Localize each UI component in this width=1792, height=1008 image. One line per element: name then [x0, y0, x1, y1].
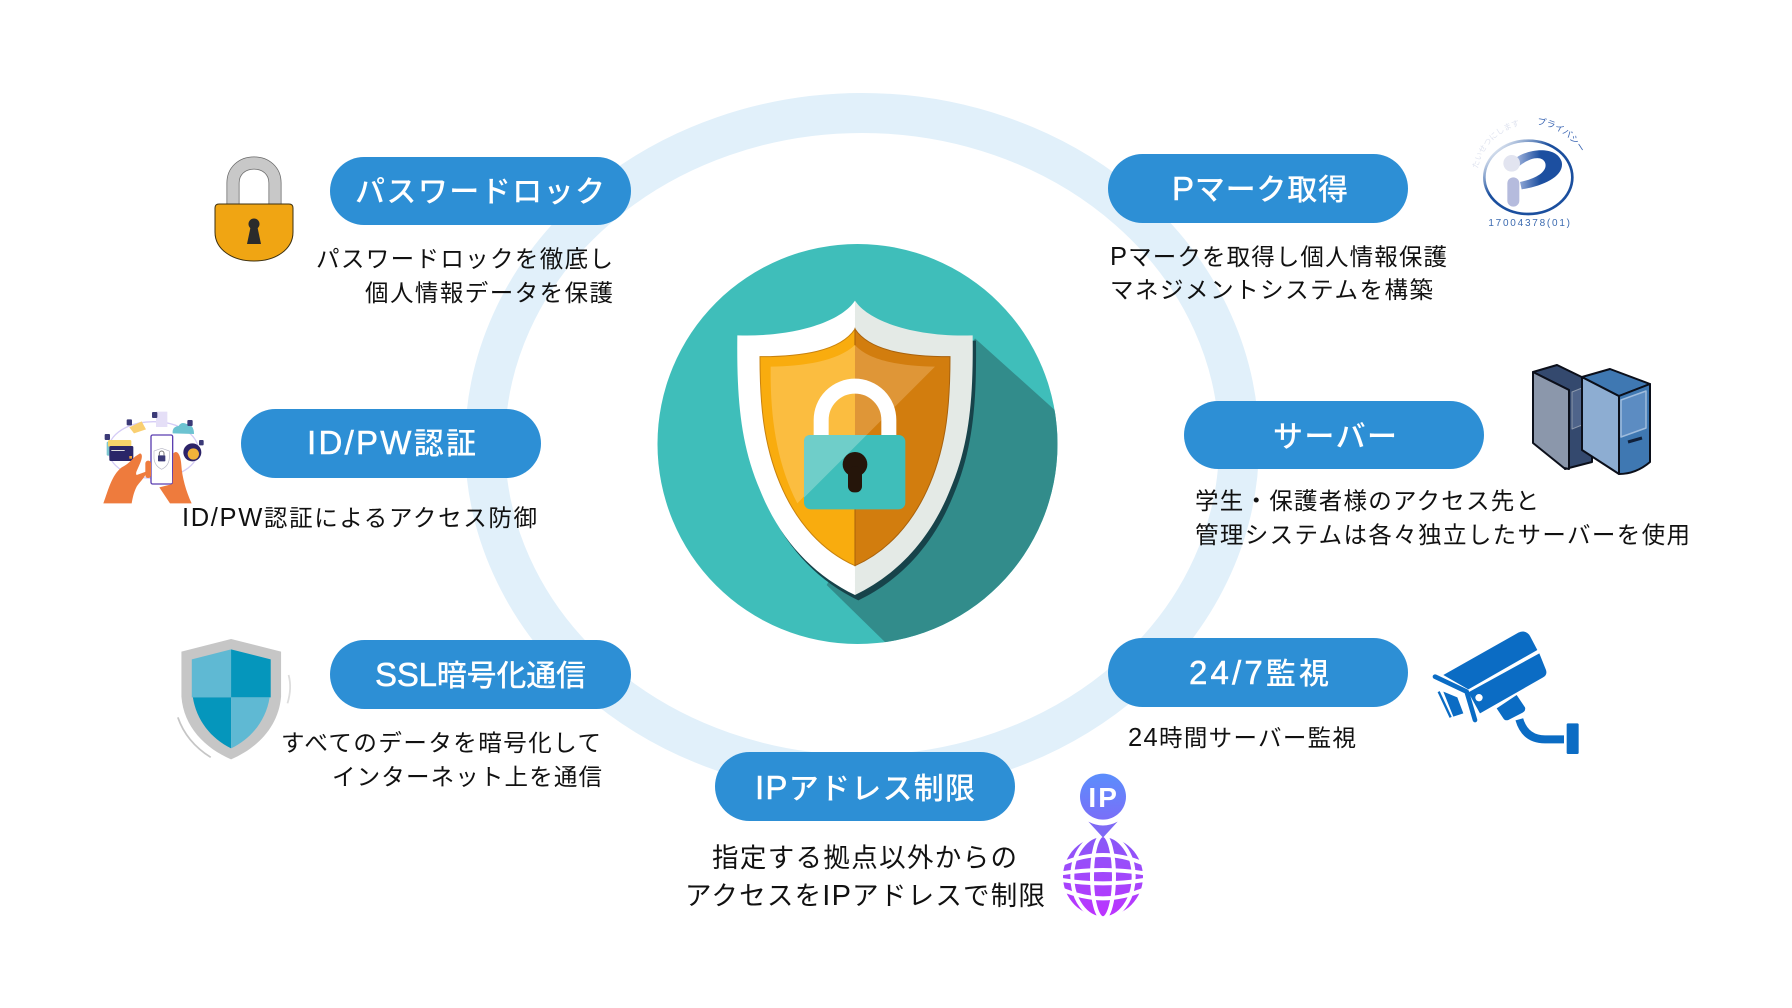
text: SSL description	[281, 730, 602, 790]
icon: IP globe pin	[1061, 774, 1145, 918]
icon: privacy mark: たいせつにします	[1472, 120, 1518, 168]
pill: P mark heading: Pマーク取得	[1172, 170, 1348, 207]
text: SSL description: すべてのデータを暗号化して	[281, 730, 601, 756]
text: password lock description: 個人情報データを保護	[365, 280, 613, 306]
pill: IP heading: IPアドレス制限	[755, 769, 975, 806]
panel: IP address restriction	[685, 752, 1145, 918]
text: SSL description: インターネット上を通信	[332, 764, 602, 790]
icon: IP globe pin: IP	[1088, 782, 1119, 813]
pill: SSL heading: SSL暗号化通信	[375, 656, 586, 693]
panel: server	[1184, 365, 1690, 548]
text: ID/PW description: ID/PW認証によるアクセス防御	[182, 504, 537, 532]
pill: IP heading	[715, 752, 1015, 821]
icon: security camera	[1435, 632, 1579, 754]
background ring	[485, 113, 1239, 775]
icon: privacy mark: プライバシー	[1538, 118, 1583, 150]
pill: ID/PW heading	[241, 409, 541, 478]
text: server description: 学生・保護者様のアクセス先と	[1195, 488, 1539, 514]
pill: SSL heading	[330, 640, 631, 709]
text: password lock description	[316, 246, 613, 306]
panel: 24/7 monitoring	[1108, 632, 1579, 754]
text: P mark description: Pマークを取得し個人情報保護	[1110, 243, 1447, 271]
text: P mark description: マネジメントシステムを構築	[1110, 277, 1433, 303]
pill: ID/PW heading: ID/PW認証	[307, 424, 476, 461]
infographic canvas	[103, 93, 1688, 916]
icon: privacy mark	[1472, 118, 1583, 229]
pill: P mark heading	[1108, 154, 1408, 223]
text: IP description: アクセスをIPアドレスで制限	[685, 880, 1045, 912]
text: IP description	[685, 843, 1045, 912]
pill: server heading: サーバー	[1273, 421, 1397, 454]
panel: SSL encryption	[178, 639, 631, 790]
pill: monitoring heading: 24/7監視	[1189, 654, 1329, 691]
pill: server heading	[1184, 401, 1484, 469]
icon: blue shield	[178, 639, 290, 759]
text: password lock description: パスワードロックを徹底し	[316, 246, 613, 272]
icon: padlock	[215, 163, 293, 261]
icon: hands with smartphone	[103, 412, 204, 503]
icon: server towers	[1533, 365, 1650, 474]
pill: monitoring heading	[1108, 638, 1408, 707]
panel: ID/PW authentication	[103, 409, 541, 532]
text: server description: 管理システムは各々独立したサーバーを使用	[1195, 522, 1690, 548]
text: IP description: 指定する拠点以外からの	[712, 843, 1017, 873]
text: P mark description	[1110, 243, 1447, 303]
panel: P mark	[1108, 118, 1583, 303]
text: server description	[1195, 488, 1690, 548]
text: monitoring description: 24時間サーバー監視	[1128, 724, 1356, 752]
icon: privacy mark: 17004378(01)	[1488, 218, 1570, 229]
pill: password lock heading	[330, 157, 631, 225]
pill: password lock heading: パスワードロック	[355, 176, 605, 209]
panel: password lock	[215, 157, 631, 306]
central shield emblem	[657, 244, 1073, 663]
